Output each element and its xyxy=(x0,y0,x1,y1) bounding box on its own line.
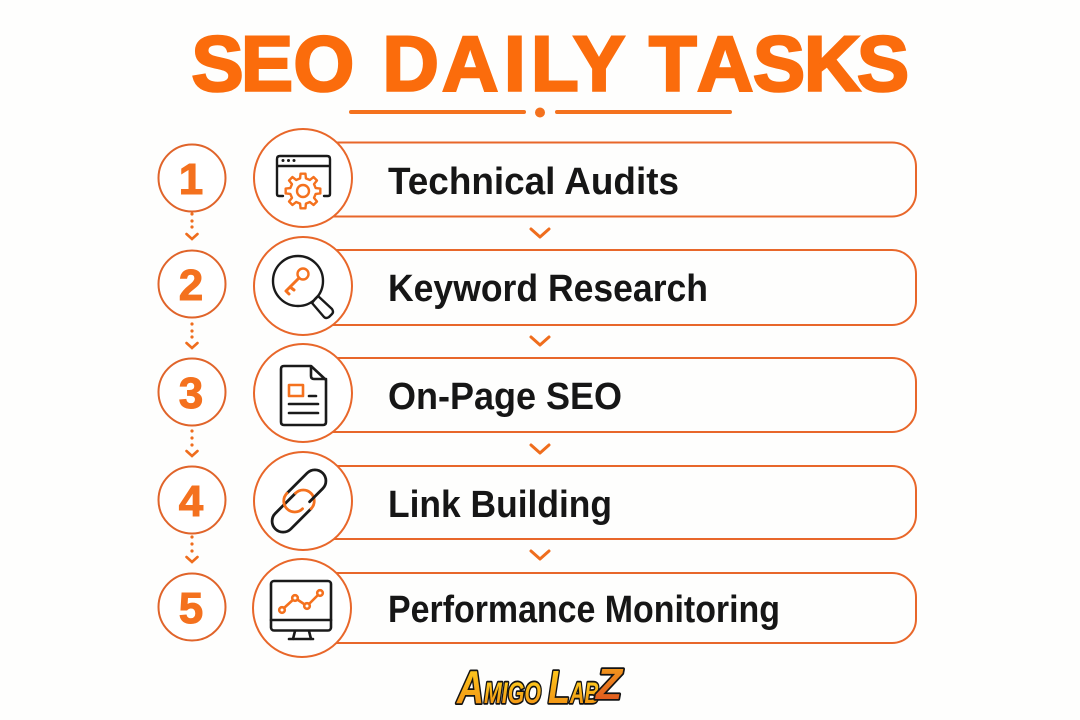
title divider xyxy=(349,108,732,118)
icon: monitor with line chart xyxy=(271,581,331,639)
number badge 1 xyxy=(158,144,226,212)
icon: magnifier with key xyxy=(273,256,333,318)
number badge 1: 1 xyxy=(179,155,203,204)
icon: chain link xyxy=(263,465,335,537)
logo: Amigo Labz: Z xyxy=(594,660,624,709)
icon: document xyxy=(281,366,326,425)
dotted arrow 2-3 xyxy=(186,322,198,348)
logo: Amigo Labz xyxy=(456,660,624,713)
number badge 5: 5 xyxy=(179,584,203,633)
icon: browser window with gear xyxy=(277,156,330,208)
logo: Amigo Labz: A xyxy=(456,661,484,713)
label 3: On-Page SEO xyxy=(388,376,622,418)
icon circle 2 xyxy=(254,237,352,335)
number badge 3: 3 xyxy=(179,369,203,418)
panel: pill 2 xyxy=(300,250,916,325)
icon circle 5 xyxy=(253,559,351,657)
number badge 2 xyxy=(158,250,226,318)
label 2: Keyword Research xyxy=(388,268,708,310)
row 4: Link Building xyxy=(158,452,916,550)
row 2: Keyword Research xyxy=(158,237,916,335)
dotted arrow 3-4 xyxy=(186,429,198,456)
icon circle 4 xyxy=(254,452,352,550)
label 5: Performance Monitoring xyxy=(388,589,780,631)
title: SEO DAILY TASKS xyxy=(192,20,909,108)
dotted arrow 4-5 xyxy=(186,535,198,562)
panel: pill 3 xyxy=(300,358,916,432)
panel: pill 5 xyxy=(300,573,916,643)
row 3: On-Page SEO xyxy=(158,344,916,442)
connector chevron 3-4 xyxy=(531,445,549,453)
row 1: Technical Audits xyxy=(158,129,916,227)
row 5: Performance Monitoring xyxy=(158,559,916,657)
panel: pill 1 xyxy=(300,142,916,216)
number badge 5 xyxy=(158,574,226,640)
icon circle 3 xyxy=(254,344,352,442)
icon circle 1 xyxy=(254,129,352,227)
number badge 2: 2 xyxy=(179,261,203,310)
logo: Amigo Labz: L xyxy=(548,661,570,713)
logo: Amigo Labz: AB xyxy=(569,677,599,710)
number badge 3 xyxy=(158,358,226,426)
dotted arrow 1-2 xyxy=(186,212,198,239)
number badge 4: 4 xyxy=(179,477,204,526)
connector chevron 2-3 xyxy=(531,337,549,345)
number badge 4 xyxy=(158,466,226,534)
label 4: Link Building xyxy=(388,484,612,526)
connector chevron 4-5 xyxy=(531,551,549,559)
connector chevron 1-2 xyxy=(531,229,549,237)
logo: Amigo Labz: MIGO xyxy=(484,677,541,710)
panel: pill 4 xyxy=(300,466,916,539)
label 1: Technical Audits xyxy=(388,161,679,203)
